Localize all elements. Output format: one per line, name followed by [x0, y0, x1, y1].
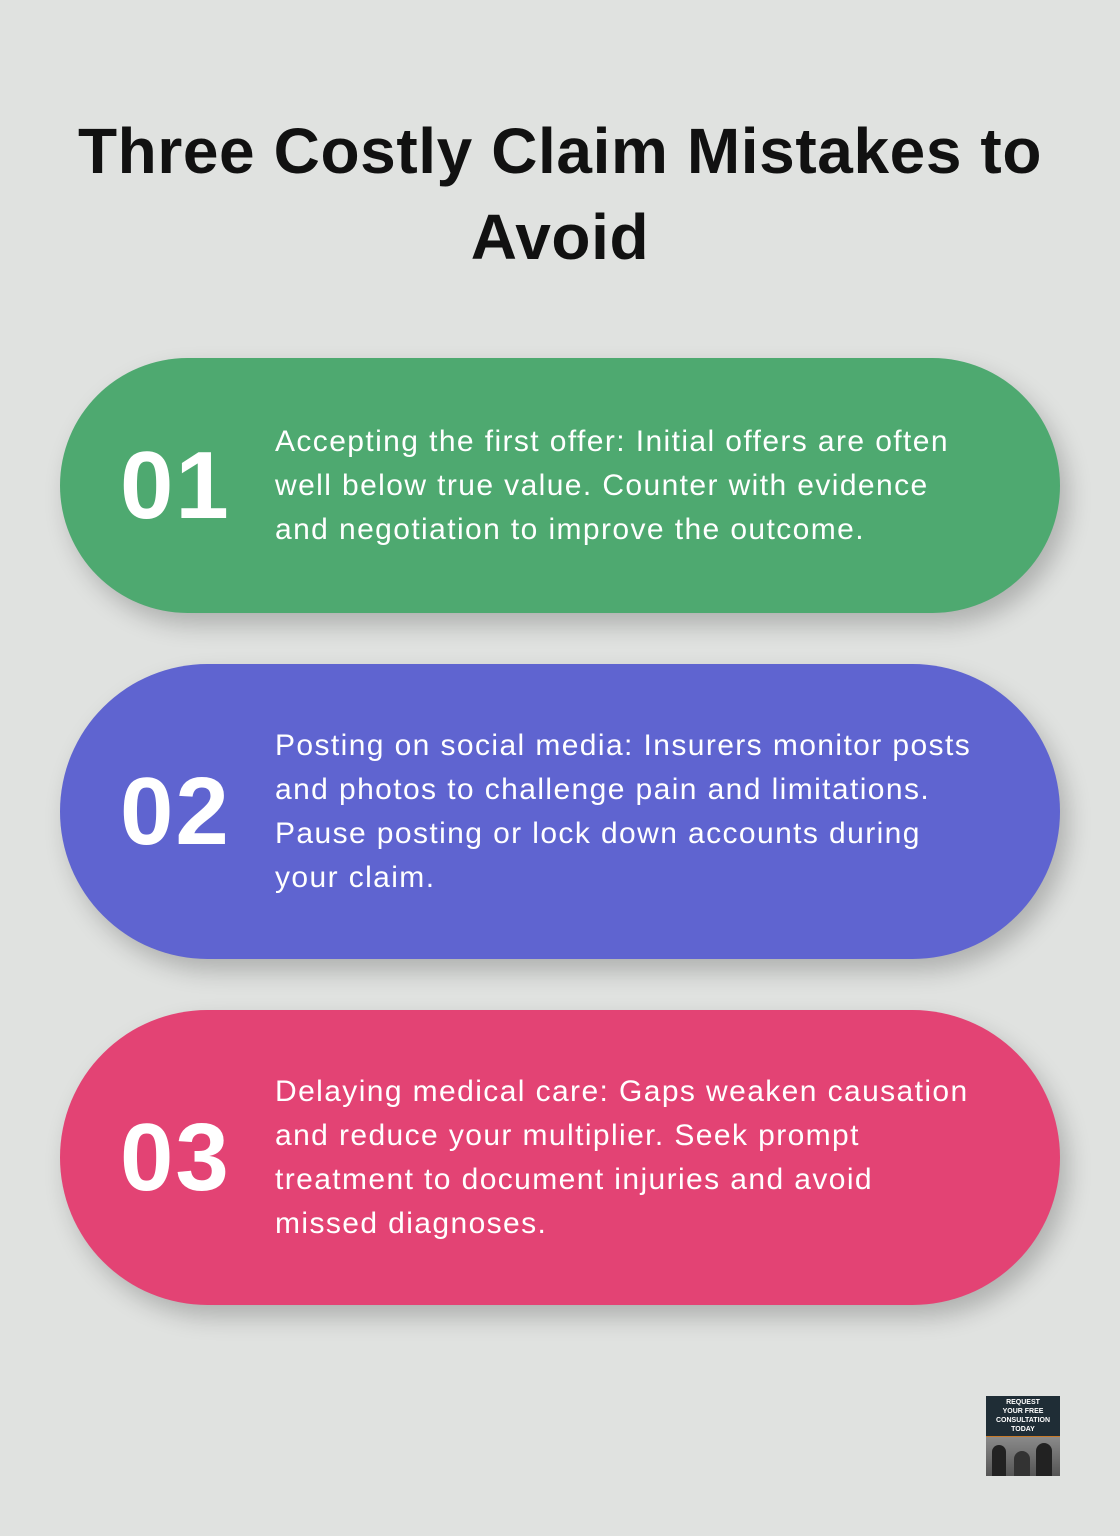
number 02: 02 [120, 758, 231, 864]
logo: consultation badge: TODAY [1011, 1426, 1035, 1433]
text 02 [275, 728, 971, 894]
panel: mistake 03 [60, 1010, 1060, 1305]
title: Avoid [471, 201, 649, 273]
title: Three Costly Claim Mistakes to [78, 115, 1042, 187]
text 02: Pause posting or lock down accounts during [275, 816, 921, 850]
text 02: and photos to challenge pain and limitations. [275, 772, 930, 806]
text 02: Posting on social media: Insurers monitor posts [275, 728, 971, 762]
logo: consultation badge: REQUEST [1006, 1399, 1040, 1406]
text 03: Delaying medical care: Gaps weaken causation [275, 1074, 969, 1108]
text 03: and reduce your multiplier. Seek prompt [275, 1118, 860, 1152]
text 02: your claim. [275, 860, 435, 894]
text 03: missed diagnoses. [275, 1206, 547, 1240]
text 01: Accepting the first offer: Initial offers are often [275, 424, 949, 458]
number 01: 01 [120, 432, 231, 538]
text 01: and negotiation to improve the outcome. [275, 512, 865, 546]
panel: mistake 01 [60, 358, 1060, 613]
logo: consultation badge: CONSULTATION [996, 1417, 1050, 1424]
logo: consultation badge [986, 1396, 1060, 1476]
text 01: well below true value. Counter with evidence [275, 468, 929, 502]
text 01 [275, 424, 949, 546]
title [78, 115, 1042, 273]
text 03: treatment to document injuries and avoid [275, 1162, 873, 1196]
text 03 [275, 1074, 969, 1240]
number 03: 03 [120, 1104, 231, 1210]
panel: mistake 02 [60, 664, 1060, 959]
logo: consultation badge: YOUR FREE [1003, 1408, 1043, 1415]
